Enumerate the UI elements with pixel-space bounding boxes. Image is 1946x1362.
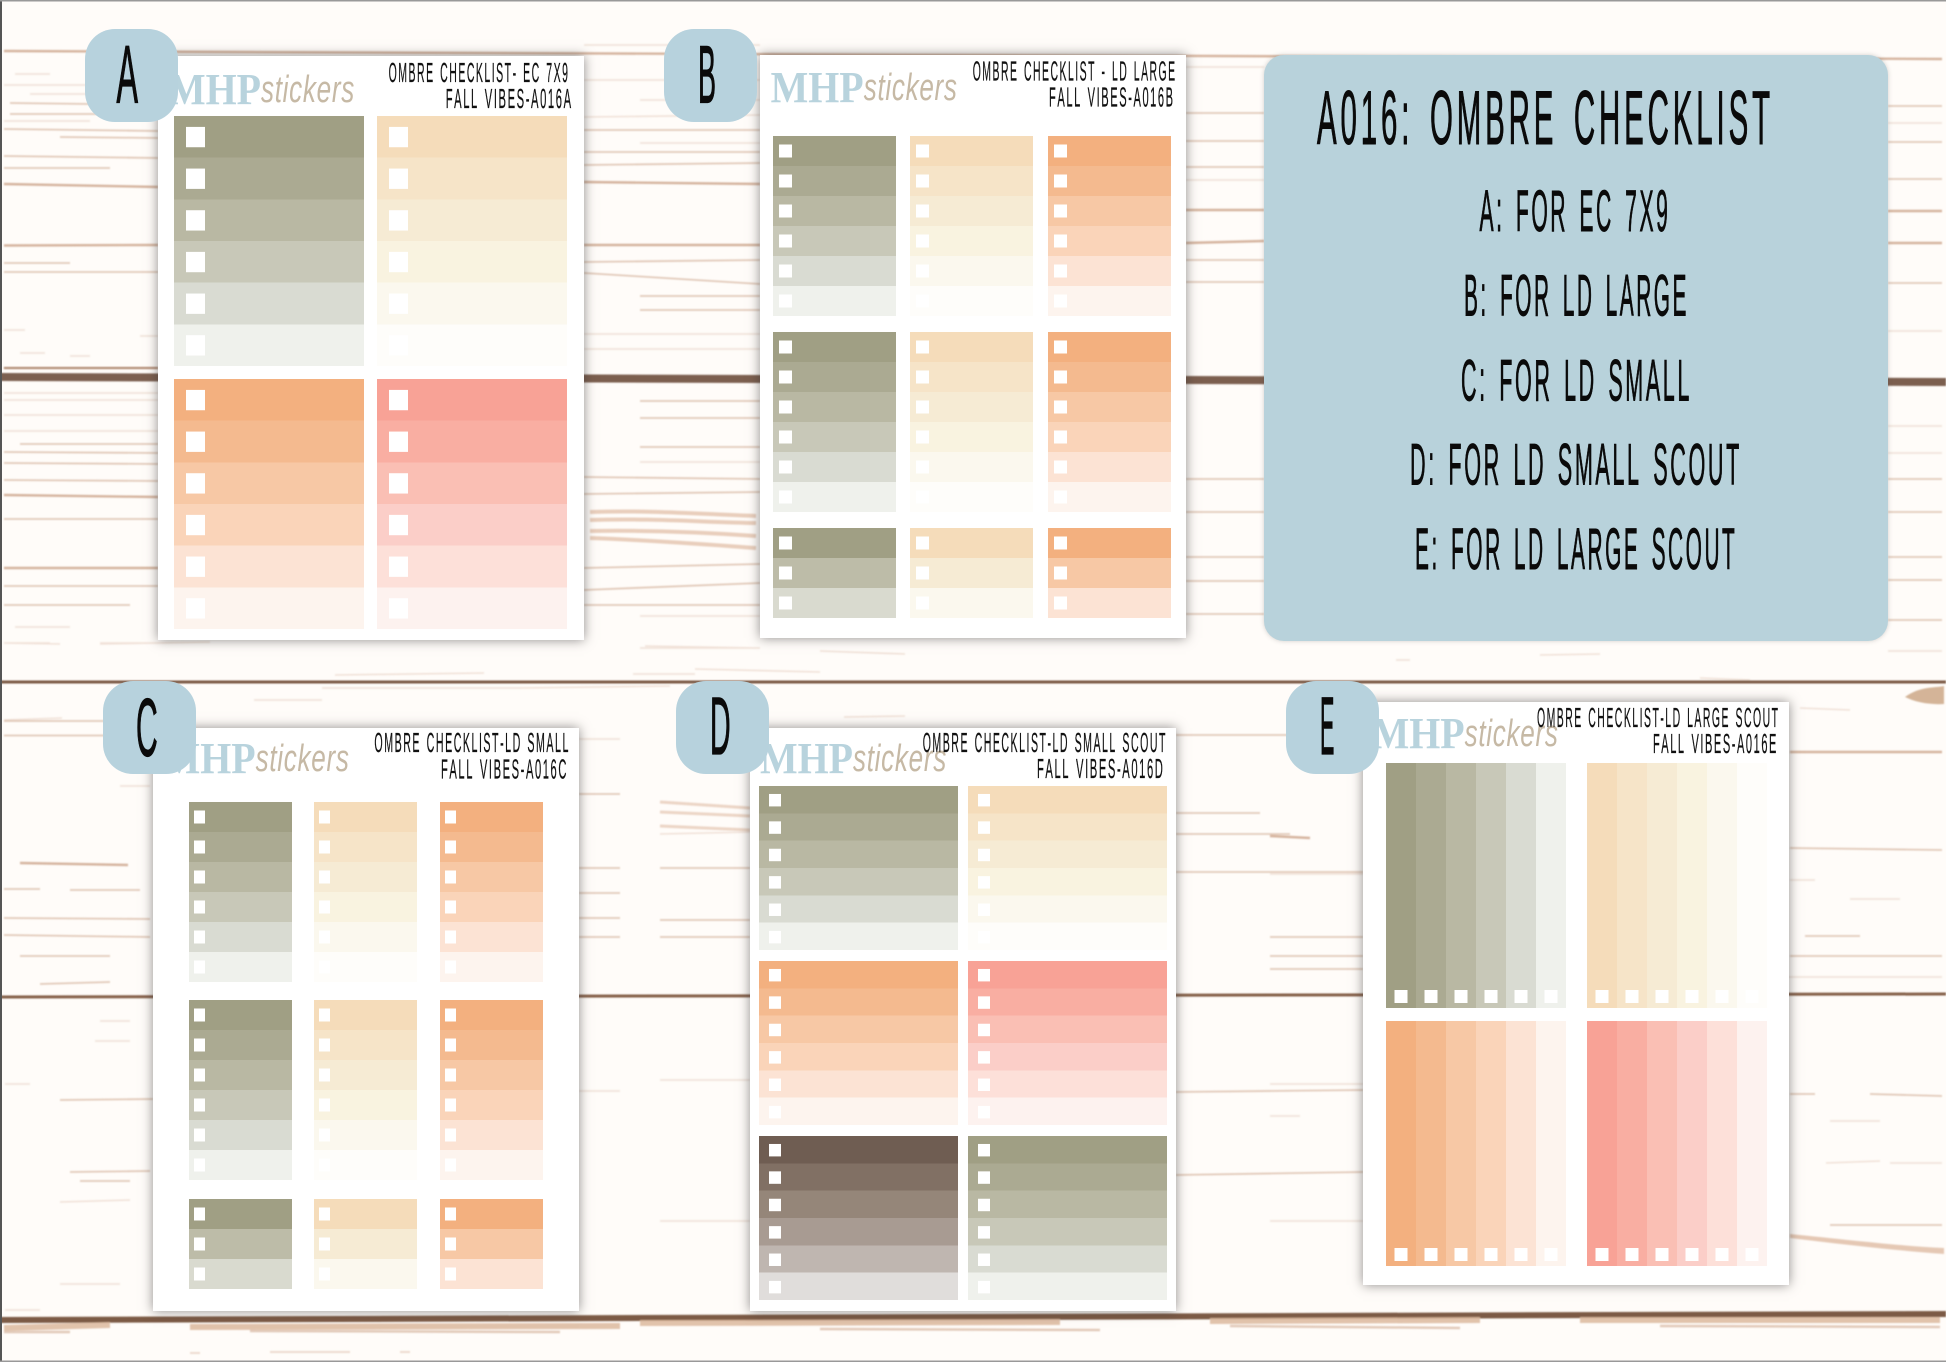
beige block row 2	[910, 332, 1033, 512]
seam lines between planks	[0, 373, 1946, 386]
beige ombre block	[377, 116, 567, 366]
header text and logo: MHP	[1372, 710, 1465, 758]
header text and logo: FALL VIBES-A016B	[1049, 82, 1175, 113]
header text and logo: FALL VIBES-A016D	[1037, 753, 1164, 785]
header text and logo	[771, 57, 1177, 113]
header text and logo: MHP	[760, 735, 853, 783]
header text and logo: MHP	[168, 66, 261, 114]
badge A	[84, 29, 178, 122]
green block row 2	[189, 1000, 292, 1180]
badge C: C	[136, 683, 157, 774]
header text and logo	[163, 728, 570, 785]
list item D: D: FOR LD SMALL SCOUT	[1410, 432, 1742, 497]
orange block row 1	[1048, 136, 1171, 316]
green block row 2	[773, 332, 896, 512]
brown block	[759, 1136, 958, 1300]
pink ombre block	[377, 379, 567, 629]
header text and logo: FALL VIBES-A016E	[1653, 728, 1778, 760]
header text and logo: stickers	[261, 67, 355, 110]
header text and logo: FALL VIBES-A016C	[441, 753, 568, 785]
wood grain streak clusters	[590, 511, 756, 548]
badge D: D	[710, 681, 731, 773]
header text and logo: stickers	[1465, 711, 1559, 754]
header text and logo: OMBRE CHECKLIST-LD LARGE SCOUT	[1537, 703, 1780, 734]
orange block	[759, 960, 958, 1124]
second green block	[968, 1136, 1167, 1300]
title: A016: OMBRE CHECKLIST	[1317, 76, 1774, 161]
beige short block	[910, 528, 1033, 618]
sheet C: LD small	[153, 728, 579, 1311]
list item B: B: FOR LD LARGE	[1464, 264, 1689, 328]
orange short block	[440, 1199, 542, 1289]
orange block row 2	[440, 1000, 542, 1180]
header text and logo	[168, 58, 573, 115]
list item A: A: FOR EC 7X9	[1480, 179, 1670, 244]
orange block row 1	[440, 802, 542, 982]
header text and logo	[1372, 703, 1780, 760]
badge C	[103, 681, 196, 774]
badge A: A	[116, 30, 138, 120]
header text and logo: stickers	[853, 736, 947, 779]
beige short block	[314, 1199, 417, 1289]
badge B: B	[698, 28, 716, 119]
list item C: C: FOR LD SMALL	[1461, 348, 1692, 413]
green block	[759, 786, 958, 950]
orange block row 2	[1048, 332, 1171, 512]
beige block row 1	[910, 136, 1033, 316]
beige block row 1	[314, 802, 417, 982]
header text and logo: OMBRE CHECKLIST-LD SMALL SCOUT	[923, 728, 1167, 759]
header text and logo: stickers	[256, 736, 350, 779]
header text and logo: MHP	[771, 64, 864, 112]
sheet D: LD small scout	[750, 728, 1176, 1311]
badge E	[1286, 681, 1379, 774]
vertical orange block	[1386, 1021, 1566, 1266]
header text and logo: OMBRE CHECKLIST-LD SMALL	[374, 728, 570, 759]
panel: title and size list	[1264, 54, 1888, 640]
header text and logo: stickers	[864, 65, 958, 108]
green short block	[189, 1199, 292, 1289]
vertical green block	[1386, 763, 1566, 1008]
badge E: E	[1320, 680, 1334, 772]
green block row 1	[189, 802, 292, 982]
green ombre block	[174, 116, 364, 366]
header text and logo: OMBRE CHECKLIST- EC 7X9	[389, 58, 569, 89]
image edge lines	[0, 0, 2, 1362]
sheet E: LD large scout	[1363, 702, 1789, 1285]
header text and logo: FALL VIBES-A016A	[446, 83, 573, 115]
badge D	[676, 681, 769, 774]
pink block	[968, 960, 1167, 1124]
orange short block	[1048, 528, 1171, 618]
list item E: E: FOR LD LARGE SCOUT	[1415, 518, 1737, 582]
header text and logo: OMBRE CHECKLIST - LD LARGE	[973, 57, 1177, 87]
orange ombre block	[174, 379, 364, 629]
beige block row 2	[314, 1000, 417, 1180]
header text and logo	[760, 728, 1167, 785]
green short block	[773, 528, 896, 618]
green block row 1	[773, 136, 896, 316]
badge B	[664, 29, 757, 122]
header text and logo: MHP	[163, 735, 256, 783]
beige block	[968, 786, 1167, 950]
vertical beige block	[1586, 763, 1766, 1008]
vertical pink block	[1586, 1021, 1766, 1266]
sheet A: EC 7x9	[158, 56, 584, 640]
sheet B: LD large	[760, 55, 1186, 638]
